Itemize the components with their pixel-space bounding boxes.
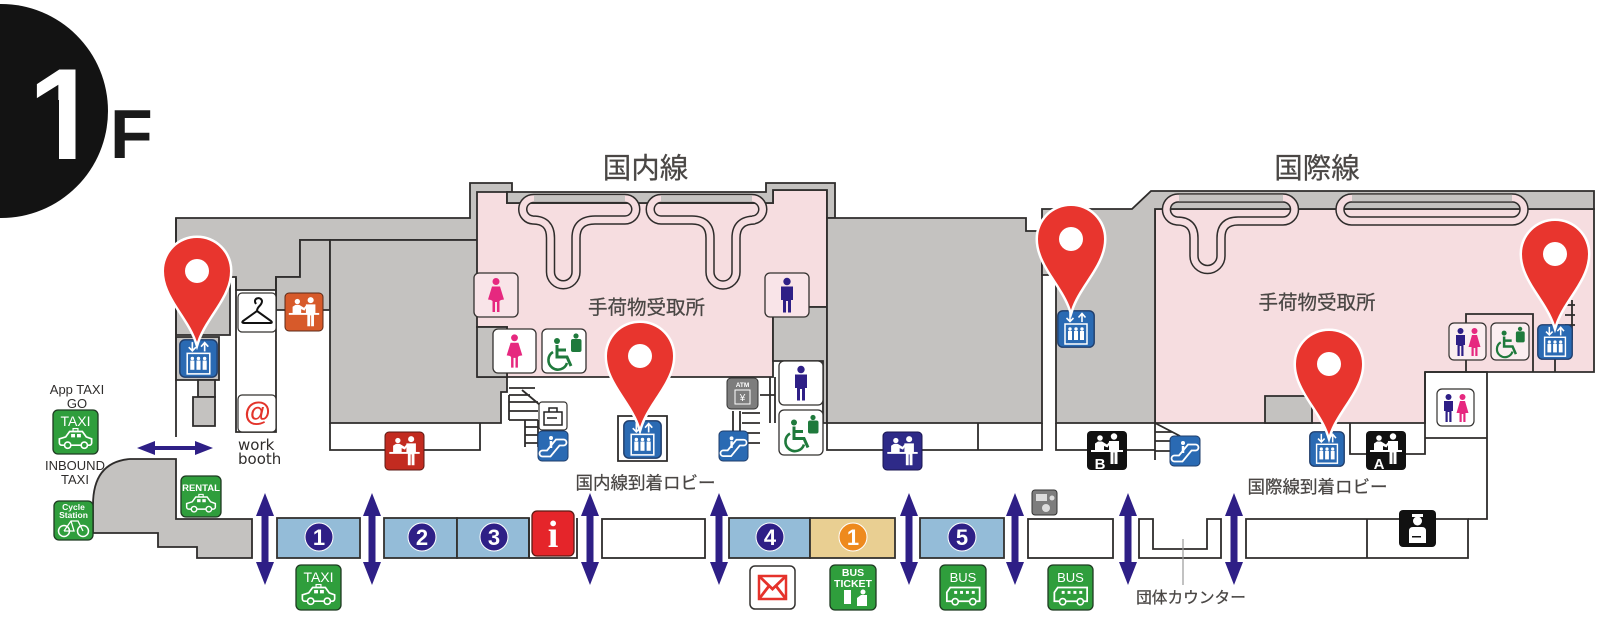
icon: elevator international hall [1538,325,1572,359]
icon: rental car [181,476,221,517]
icon: app taxi: TAXI [60,413,91,429]
floor plan: west wing [93,183,512,558]
icon: escalator west [538,431,568,461]
icon: mail [750,566,795,609]
icon: women restroom lower [493,329,536,373]
counter 4: 4 [764,525,777,550]
icon: women restroom upper [474,273,518,317]
label: international arrival lobby: 国際線到着ロビー [1248,477,1388,497]
floor plan: domestic baggage hall [477,183,835,423]
heading: international: 国際線 [1274,153,1360,185]
icon: restroom pair in hall [1449,323,1486,360]
icon: taxi stand: TAXI [303,569,334,585]
map pin: central elevator [1038,206,1104,310]
icon: men restroom lower [779,361,823,405]
icon: elevator international lobby [1310,432,1344,466]
icon: black service desk B: B [1095,456,1106,473]
icon: ATM: ATM [736,382,749,389]
stairs [509,377,775,461]
map pin: international lobby elevator [1296,331,1362,435]
counter 1 [277,518,360,558]
counter blank 2 [602,519,705,558]
bus ticket counter 1 [810,518,895,558]
icon: cycle station: Cycle [62,502,85,512]
icon: ATM [727,378,758,409]
counter 4 [729,518,810,558]
icon: elevator domestic [624,421,661,458]
group counter outline [1139,519,1221,558]
icon: navy service desk [883,432,922,470]
icon: elevator central [1058,311,1094,347]
counter blank [529,518,577,558]
icon: accessible restroom international [1491,323,1529,360]
icon: bus ticket [830,565,876,610]
text: work booth: booth [238,450,281,468]
icon: restroom pair lobby [1437,389,1474,426]
icon: men restroom upper [765,273,809,317]
icon: bus stop 2 [1048,565,1093,610]
heading: domestic: 国内線 [603,153,688,185]
text: work booth: work [238,436,275,454]
icon: conductor service [1399,510,1436,547]
leader line: group counter [1182,539,1184,585]
label: domestic arrival lobby: 国内線到着ロビー [576,473,716,493]
icon: bus stop 1: BUS [950,570,977,585]
icon: cycle station [54,501,93,540]
icon: currency exchange [1032,490,1057,515]
arrows: walkways [137,441,1243,585]
icon: bus ticket: BUS [842,567,864,579]
map pin: international hall elevator [1522,221,1588,325]
floor badge: 1F: 1 [28,41,100,187]
icon: information: i [548,514,558,556]
icon: taxi stand [296,565,341,610]
icon: work booth at sign: @ [244,397,270,427]
text: app taxi label [50,382,104,411]
label: international baggage claim: 手荷物受取所 [1258,292,1376,314]
icon: black service desk A: A [1374,456,1385,473]
icon: bus stop 1 [940,565,986,610]
counter 2 [384,518,457,558]
icon: accessible restroom east [779,410,823,455]
floor badge: 1F: F [110,95,153,173]
counters row [277,518,1468,558]
icon: escalator international [1170,436,1200,466]
counter 3 [457,518,529,558]
icon: ATM: ¥ [739,393,746,404]
floor plan: central block [827,218,1042,450]
counter 5 [920,518,1004,558]
baggage carousels: international [1166,198,1524,270]
text: inbound taxi label: INBOUND [45,458,105,473]
icon: bus ticket: TICKET [834,578,873,590]
floor badge: 1F [0,4,153,218]
icon: accessible restroom west [542,329,586,373]
counter 5: 5 [956,525,968,550]
text: app taxi label: App TAXI [50,382,104,397]
icon: information [532,511,574,556]
icon: elevator west [180,340,217,377]
icon: rental car: RENTAL [182,483,220,494]
icon: black service desk A [1366,431,1406,473]
icon: work booth at sign [238,395,276,432]
baggage carousels: domestic [523,198,763,285]
text: inbound taxi label: TAXI [61,472,89,487]
text: inbound taxi label [45,458,105,487]
map pin: west elevator [164,238,230,342]
icon: app taxi [53,410,98,454]
counter blank 4 [1246,519,1468,558]
icon: orange information desk [285,293,323,331]
icon: baggage storage locker [539,402,567,430]
bus ticket counter 1: 1 [847,525,859,550]
label: domestic baggage claim: 手荷物受取所 [588,297,705,319]
floor plan: international baggage hall [1042,191,1594,519]
text: work booth [238,436,281,468]
icon: black service desk B [1087,431,1127,473]
icon: cloakroom hanger [238,293,276,332]
icon: escalator east [719,431,748,461]
icon: bus stop 2: BUS [1057,570,1084,585]
map pin: domestic lobby elevator [607,323,673,427]
counter 3: 3 [488,525,500,550]
label: group counter: 団体カウンター [1136,589,1246,607]
counter 1: 1 [313,525,325,550]
text: app taxi label: GO [67,396,87,411]
icon: cycle station: Station [59,510,88,520]
counter 2: 2 [416,525,428,550]
counter blank 3 [1028,519,1113,558]
icon: red service desk [385,432,424,470]
